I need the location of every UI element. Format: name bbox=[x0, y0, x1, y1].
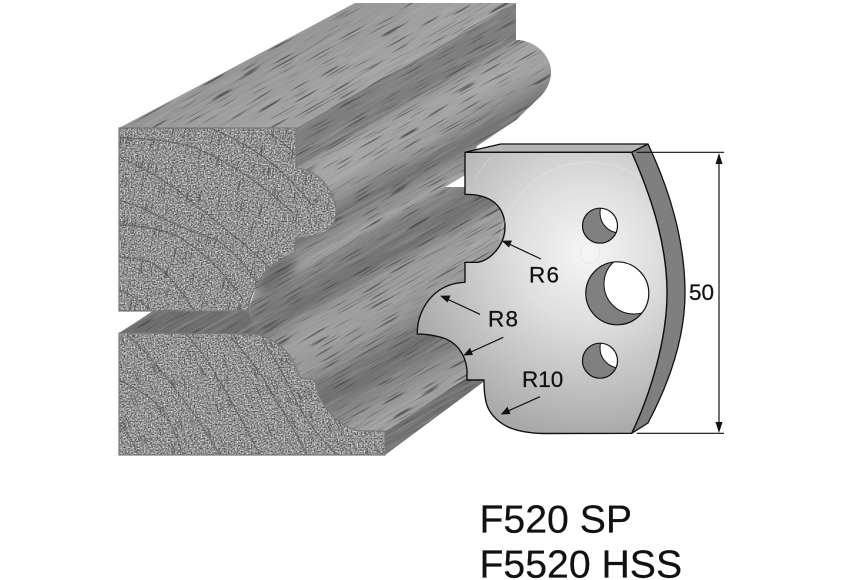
front face of upper block bbox=[120, 128, 336, 310]
arrow: R6 leader bbox=[502, 240, 541, 259]
product codes: F520 SP bbox=[480, 499, 632, 542]
wood moulding bbox=[118, 3, 551, 456]
large centre hole bbox=[585, 261, 650, 326]
front face outline lower bbox=[119, 333, 385, 455]
product codes bbox=[480, 499, 682, 580]
knife top facet bbox=[465, 144, 648, 152]
label: R6: R6 bbox=[529, 263, 560, 288]
dimension: 50 mm height bbox=[637, 152, 724, 433]
side of lower block bbox=[385, 377, 486, 455]
top small hole bbox=[582, 208, 618, 244]
shadow band of upper block bbox=[296, 3, 516, 168]
lower and upper profile surfaces bbox=[248, 40, 551, 455]
cove shadow bbox=[251, 252, 301, 300]
knife face bbox=[417, 152, 667, 434]
dimension: 50 mm height: 50 bbox=[689, 280, 714, 305]
arrow: R8 lower leader bbox=[463, 337, 503, 356]
top face of upper block bbox=[119, 3, 516, 128]
front face of lower block bbox=[120, 334, 384, 454]
arrow: R8 upper leader bbox=[440, 296, 480, 314]
arrow: R10 leader bbox=[501, 397, 540, 414]
front face outline upper bbox=[119, 128, 336, 311]
top ledge of lower block bbox=[119, 311, 256, 334]
knife bevel edge bbox=[632, 144, 685, 433]
grinding marks bbox=[476, 157, 640, 319]
wood grain on surfaces bbox=[122, 3, 551, 451]
bottom small hole bbox=[582, 342, 618, 379]
label: R10: R10 bbox=[522, 367, 563, 392]
cutter knife bbox=[417, 144, 685, 434]
label: R8: R8 bbox=[488, 307, 519, 332]
